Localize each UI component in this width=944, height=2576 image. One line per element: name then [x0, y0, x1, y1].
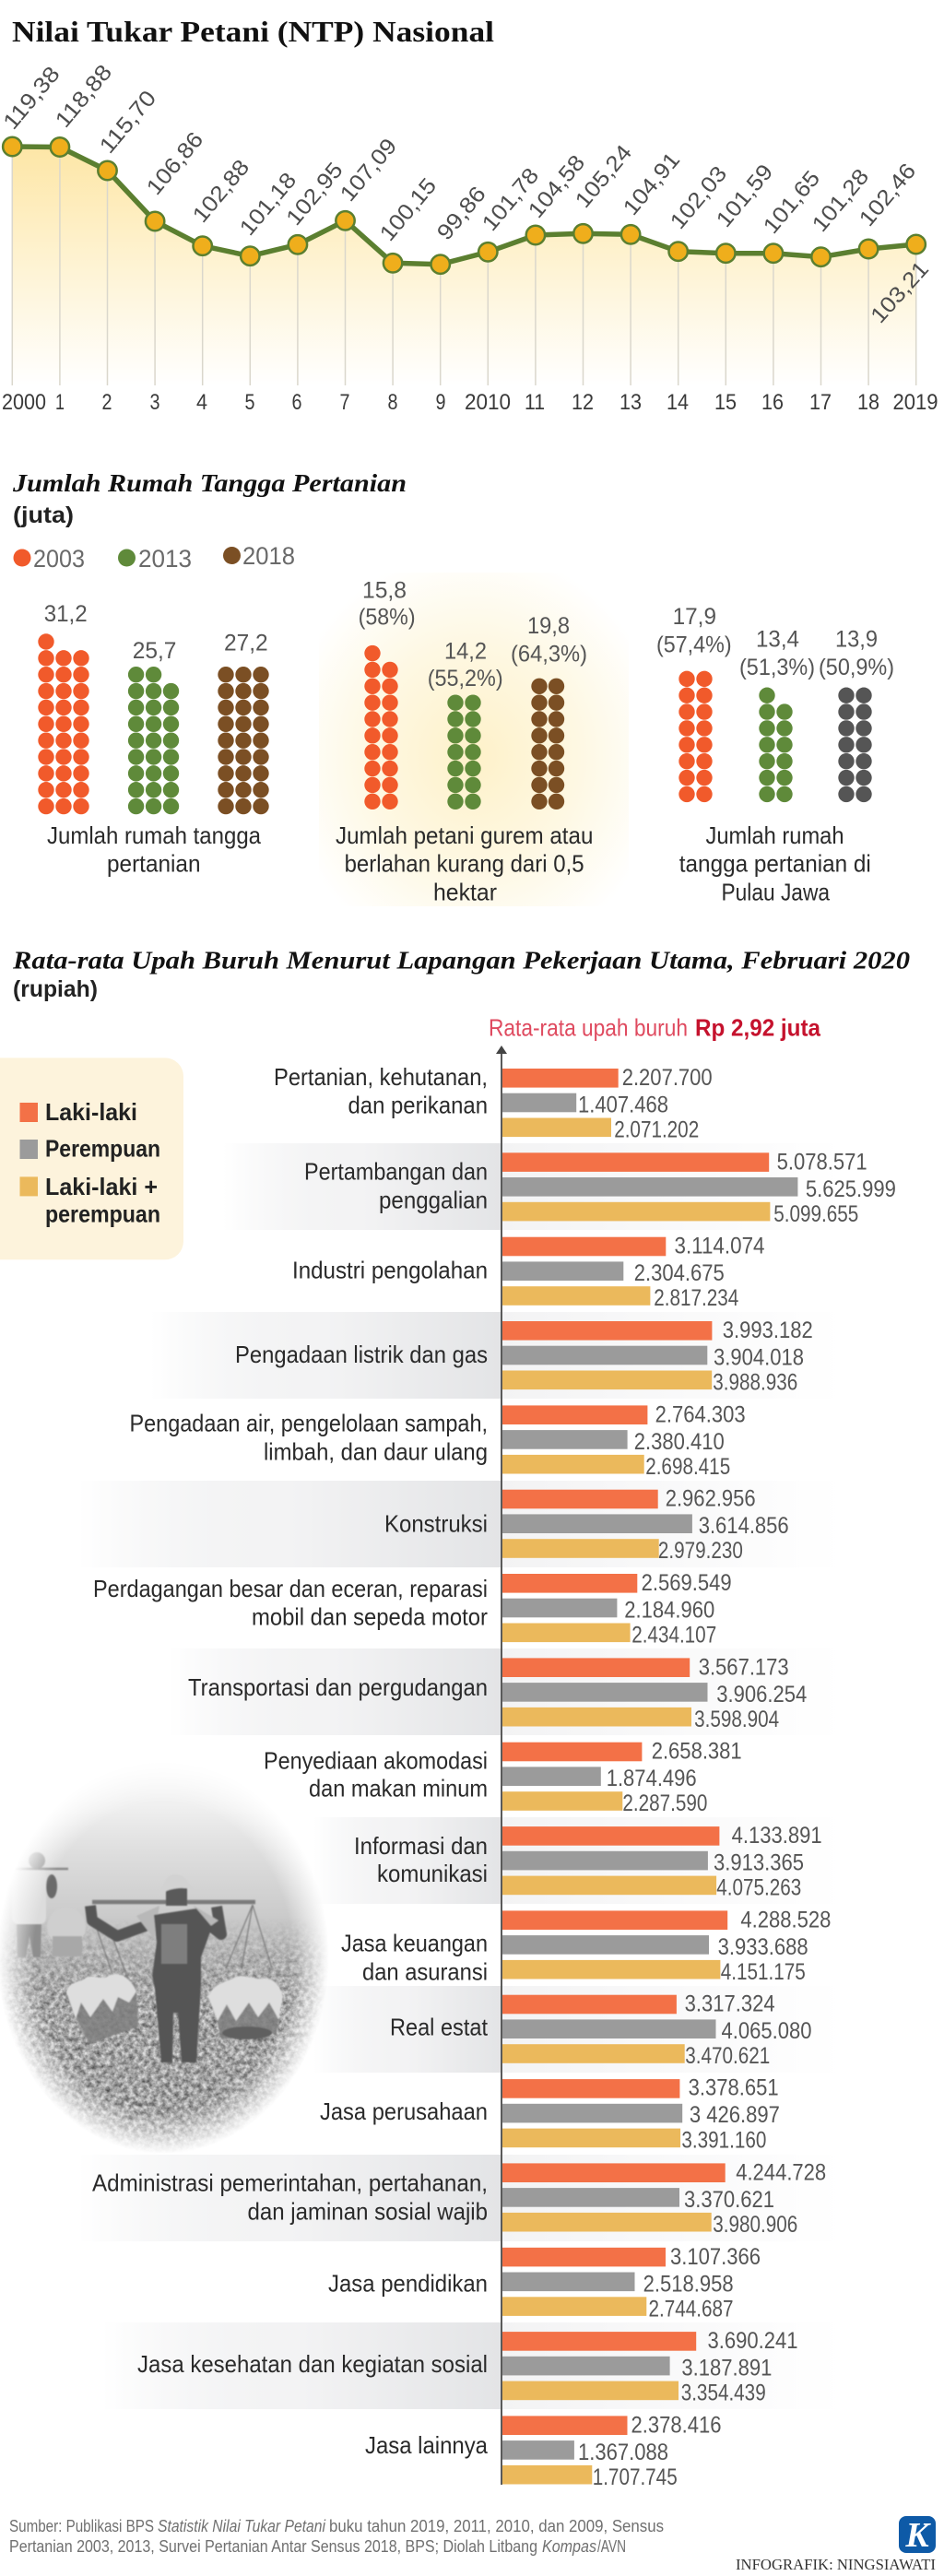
- values: 5.625.999: [806, 1176, 896, 1202]
- values: 2.962.956: [666, 1486, 756, 1512]
- bars: [502, 1321, 712, 1389]
- values: 3.187.891: [681, 2356, 772, 2381]
- values: [684, 2159, 826, 2238]
- row: Transportasi dan pergudangan: [188, 1654, 807, 1732]
- values: 3.378.651: [689, 2075, 779, 2101]
- caption: tangga pertanian di: [679, 849, 871, 877]
- bars: [502, 1069, 619, 1137]
- swatch: perempuan: [20, 1140, 38, 1159]
- category label: mobil dan sepeda motor: [252, 1603, 488, 1631]
- values: 14,2: [444, 639, 487, 665]
- year axis labels: 8: [387, 390, 398, 415]
- legend: years: [13, 542, 295, 573]
- caption: Jumlah petani gurem atau: [336, 821, 593, 849]
- value labels: 106,86: [142, 127, 208, 200]
- dots 2018: [846, 695, 864, 794]
- values: 3.980.906: [713, 2212, 797, 2238]
- values: [624, 1570, 732, 1648]
- row: Real estat: [390, 1991, 811, 2069]
- average wage callout: Rata-rata upah buruh: [489, 1013, 688, 1041]
- values: 1.407.468: [578, 1092, 668, 1117]
- values: [681, 2328, 798, 2406]
- year axis labels: 16: [761, 390, 784, 415]
- caption: [336, 821, 593, 905]
- category label: komunikasi: [377, 1860, 488, 1887]
- values: [694, 1654, 807, 1732]
- value labels: 100,15: [375, 173, 442, 246]
- values: 3.354.439: [681, 2381, 766, 2406]
- values: 4.244.728: [736, 2159, 826, 2185]
- year axis labels: 13: [620, 390, 642, 415]
- values: 17,9: [673, 604, 716, 630]
- value labels: 102,88: [188, 155, 254, 228]
- year axis labels: 11: [525, 390, 545, 415]
- value labels: 103,21: [866, 256, 934, 328]
- legend: years: 2003: [33, 545, 85, 573]
- values: 2.434.107: [631, 1623, 716, 1648]
- year axis labels: 2: [101, 390, 112, 415]
- row: Penyediaan akomodasi: [264, 1739, 742, 1816]
- bars: [502, 1743, 642, 1811]
- values: 2.698.415: [645, 1454, 730, 1480]
- values: [658, 1486, 789, 1564]
- value labels: 119,38: [0, 62, 65, 135]
- values: 2.380.410: [634, 1429, 725, 1455]
- category label: [93, 1575, 488, 1631]
- values: [634, 1401, 746, 1480]
- logo: Kompas K: K: [904, 2516, 931, 2555]
- category label: Konstruksi: [384, 1509, 488, 1537]
- bars: [502, 1826, 719, 1895]
- average wage callout: [489, 1013, 820, 1041]
- row: Jasa kesehatan dan kegiatan sosial: [137, 2328, 798, 2406]
- category label: Jasa kesehatan dan kegiatan sosial: [137, 2350, 488, 2378]
- value labels: 115,70: [95, 86, 161, 159]
- value labels: 105,24: [571, 140, 637, 213]
- values: (57,4%): [656, 632, 732, 658]
- year axis labels: 18: [857, 390, 879, 415]
- values: (51,3%): [739, 655, 815, 680]
- row: Pengadaan air: [129, 1401, 746, 1480]
- category label: [354, 1832, 488, 1887]
- swatch: laki-laki: [20, 1103, 38, 1122]
- category label: Pengadaan listrik dan gas: [235, 1341, 488, 1368]
- category label: Jasa keuangan: [341, 1929, 488, 1956]
- category label: limbah, dan daur ulang: [264, 1437, 488, 1465]
- values: 2.744.687: [649, 2296, 734, 2322]
- axis arrow: [496, 1046, 507, 2485]
- value labels: 101,18: [235, 168, 301, 241]
- year axis labels: 12: [572, 390, 594, 415]
- unit: rupiah: (rupiah): [13, 976, 98, 1002]
- year axis labels: 7: [339, 390, 350, 415]
- values: 4.133.891: [732, 1823, 822, 1849]
- row: Industri pengolahan: [292, 1234, 765, 1311]
- swatch: laki-laki + perempuan: [20, 1176, 38, 1196]
- year axis labels: 2000: [2, 390, 46, 415]
- values: 2.287.590: [622, 1790, 707, 1816]
- values: 3.370.621: [684, 2187, 774, 2213]
- trend line: [12, 147, 916, 265]
- values: (58%): [359, 605, 416, 631]
- category label: [264, 1746, 488, 1802]
- values: 2.184.960: [624, 1597, 714, 1623]
- data points: [3, 137, 926, 274]
- caption: pertanian: [107, 849, 201, 877]
- category label: [341, 1929, 488, 1985]
- source note: Sumber: Publikasi BPS: [9, 2517, 154, 2535]
- category label: Penyediaan akomodasi: [264, 1746, 488, 1774]
- row: Jasa keuangan dan asuransi: [341, 1907, 831, 1985]
- values: 15,8: [362, 578, 407, 604]
- values: 2.764.303: [655, 1401, 746, 1427]
- value labels: 101,65: [759, 166, 825, 239]
- bars: [502, 1152, 797, 1221]
- heading: Jumlah Rumah Tangga Pertanian: Jumlah Rumah Tangga Pertanian: [12, 469, 407, 497]
- bars: [502, 2248, 666, 2316]
- values: [714, 1823, 822, 1901]
- bars: [502, 2332, 696, 2400]
- heading: Rata-rata Upah Buruh: Rata-rata Upah Buruh Menurut Lapangan Pekerjaan Utama, Februari 2020: [12, 947, 911, 975]
- bars: [502, 2416, 627, 2484]
- category label: Jasa perusahaan: [320, 2097, 488, 2125]
- caption: Jumlah rumah: [706, 821, 844, 849]
- values: 2.304.675: [634, 1260, 725, 1286]
- value labels: 99,86: [432, 182, 491, 245]
- value labels: 101,59: [712, 160, 778, 232]
- dots 2013: [767, 695, 785, 794]
- value labels: 104,58: [524, 150, 590, 223]
- values: [578, 1065, 713, 1143]
- values: [359, 578, 587, 691]
- source note: /AVN: [597, 2537, 626, 2556]
- category label: Pertanian, kehutanan,: [274, 1063, 488, 1091]
- panel: jumlah rumah tangga pertanian: [44, 601, 268, 877]
- logo: Kompas K: [899, 2516, 936, 2555]
- photo: farmer carrying baskets on shoulder pole: [0, 1790, 326, 2151]
- values: 31,2: [44, 601, 88, 627]
- values: 2.979.230: [658, 1538, 743, 1564]
- values: [634, 1234, 765, 1311]
- year axis labels: 4: [196, 390, 207, 415]
- values: 19,8: [527, 613, 570, 639]
- bars: [502, 1910, 727, 1979]
- values: 3.107.366: [670, 2244, 761, 2270]
- values: [681, 2075, 780, 2154]
- row: Administrasi pemerintahan: [92, 2159, 826, 2238]
- values: 2.569.549: [642, 1570, 732, 1596]
- category label: Informasi dan: [354, 1832, 488, 1860]
- year axis labels: 9: [435, 390, 446, 415]
- bars: [502, 1237, 666, 1306]
- line chart: NTP: [0, 60, 938, 415]
- values: [643, 2244, 761, 2322]
- source note: Statistik Nilai Tukar Petani: [158, 2517, 326, 2535]
- dots 2003: [46, 642, 81, 807]
- bars: [502, 1574, 637, 1642]
- caption: Pulau Jawa: [721, 878, 830, 905]
- values: 27,2: [224, 631, 268, 656]
- values: 2.817.234: [654, 1285, 738, 1311]
- value labels: 118,88: [51, 60, 117, 133]
- values: 3.988.936: [713, 1370, 797, 1396]
- category label: Jasa lainnya: [365, 2431, 488, 2459]
- average wage callout: Rp 2,92 juta: [695, 1013, 820, 1041]
- source note: Pertanian 2003, 2013, Survei Pertanian Antar Sensus 2018, BPS; Diolah Litbang: [9, 2537, 537, 2556]
- row: Konstruksi: [384, 1486, 789, 1564]
- dots 2003: [372, 653, 390, 801]
- area under line: [12, 147, 916, 385]
- unit: juta: (juta): [13, 502, 74, 528]
- values: 13,9: [835, 626, 878, 652]
- year axis labels: 6: [291, 390, 302, 415]
- values: 3.567.173: [699, 1654, 789, 1680]
- value labels: [0, 60, 934, 328]
- legend: years: 2018: [242, 542, 295, 570]
- row: Perdagangan besar: [93, 1570, 732, 1648]
- values: 3.470.621: [685, 2043, 770, 2069]
- category label: Perdagangan besar dan eceran, reparasi: [93, 1575, 488, 1602]
- caption: [47, 821, 261, 877]
- caption: [679, 821, 871, 905]
- values: 13,4: [756, 626, 799, 652]
- values: 4.075.263: [716, 1875, 801, 1901]
- values: 1.707.745: [593, 2464, 678, 2490]
- bars: [502, 2079, 682, 2147]
- category label: Pertambangan dan: [304, 1157, 488, 1185]
- category label: dan perikanan: [348, 1092, 488, 1119]
- category label: [129, 1409, 488, 1465]
- values: 3.933.688: [718, 1934, 808, 1960]
- values: (55,2%): [428, 666, 503, 691]
- value labels: 107,09: [336, 134, 402, 207]
- row: Jasa pendidikan: [328, 2244, 761, 2322]
- values: 3.690.241: [708, 2328, 798, 2354]
- source note: [9, 2517, 664, 2556]
- value labels: 101,28: [808, 164, 874, 237]
- year axis labels: 5: [245, 390, 254, 415]
- year axis labels: 2010: [465, 390, 511, 415]
- category label: Pengadaan air, pengelolaan sampah,: [129, 1409, 488, 1436]
- category label: Jasa pendidikan: [328, 2269, 488, 2297]
- category label: [274, 1063, 488, 1119]
- category label: dan makan minum: [309, 1775, 488, 1802]
- category label: Industri pengolahan: [292, 1257, 488, 1284]
- row: Informasi dan komunikasi: [354, 1823, 822, 1901]
- source note: buku tahun 2019, 2011, 2010, dan 2009, Sensus: [329, 2517, 664, 2535]
- legend: wage series: [0, 1058, 183, 1259]
- values: 2.378.416: [631, 2412, 721, 2438]
- values: 4.065.080: [721, 2018, 811, 2044]
- values: 3.906.254: [716, 1682, 807, 1707]
- label: laki-laki + perempuan: Laki-laki +: [45, 1173, 158, 1200]
- values: [44, 601, 268, 664]
- dots 2018: [539, 686, 557, 801]
- values: 5.078.571: [777, 1149, 867, 1175]
- bars: [502, 1658, 708, 1726]
- legend panel: [0, 1058, 183, 1259]
- category label: Transportasi dan pergudangan: [188, 1673, 488, 1701]
- values: (64,3%): [511, 642, 587, 668]
- year axis labels: 17: [809, 390, 832, 415]
- bars: [502, 1490, 692, 1558]
- dots 2018: [226, 674, 261, 807]
- year axis labels: 2019: [892, 390, 938, 415]
- panel: jumlah petani gurem: [336, 578, 593, 905]
- dots 2013: [455, 703, 473, 801]
- values: 3 426.897: [690, 2102, 780, 2128]
- row: Jasa perusahaan: [320, 2075, 780, 2154]
- value labels: 102,95: [281, 158, 348, 230]
- row: Pertambangan dan penggalian: [304, 1149, 896, 1227]
- year axis labels: 15: [714, 390, 737, 415]
- panel: rumah tangga pertanian di Pulau Jawa: [656, 604, 894, 905]
- value labels: 104,91: [619, 148, 685, 220]
- values: 1.367.088: [578, 2440, 668, 2465]
- source note: Kompas: [542, 2537, 596, 2556]
- category label: [92, 2168, 488, 2225]
- values: 3.317.324: [685, 1991, 775, 2017]
- values: 3.904.018: [714, 1344, 804, 1370]
- value labels: 102,03: [666, 161, 732, 234]
- values: [607, 1739, 742, 1816]
- values: [685, 1991, 811, 2069]
- legend: years: 2013: [138, 545, 192, 573]
- year axis labels: 3: [149, 390, 160, 415]
- value labels: 102,46: [855, 159, 921, 231]
- category label: penggalian: [379, 1186, 488, 1213]
- values: [656, 604, 894, 680]
- value labels: 101,78: [478, 163, 544, 236]
- values: 3.598.904: [694, 1707, 779, 1732]
- caption: berlahan kurang dari 0,5: [345, 849, 584, 877]
- values: [713, 1318, 813, 1396]
- caption: hektar: [433, 878, 497, 905]
- category label: Administrasi pemerintahan, pertahanan,: [92, 2168, 488, 2196]
- category label: Real estat: [390, 2013, 489, 2040]
- values: [773, 1149, 896, 1227]
- values: 3.993.182: [723, 1318, 813, 1343]
- year axis labels: [2, 390, 938, 415]
- values: 4.151.175: [721, 1959, 806, 1985]
- values: 3.913.365: [714, 1850, 804, 1876]
- credit: INFOGRAFIK: NINGSIAWATI: [736, 2556, 936, 2573]
- dots 2003: [687, 679, 704, 794]
- values: 25,7: [133, 638, 176, 664]
- label: laki-laki + perempuan: [45, 1173, 160, 1228]
- label: laki-laki + perempuan: perempuan: [45, 1200, 160, 1228]
- values: 2.518.958: [643, 2271, 734, 2297]
- row: Pengadaan listrik dan gas: [235, 1318, 813, 1396]
- values: 2.071.202: [614, 1117, 699, 1143]
- label: perempuan: Perempuan: [45, 1134, 160, 1162]
- category label: dan jaminan sosial wajib: [247, 2197, 488, 2225]
- panel: petani gurem highlight background: [319, 573, 629, 906]
- values: 3.614.856: [699, 1513, 789, 1539]
- values: 1.874.496: [607, 1766, 697, 1791]
- row: Jasa lainnya: [365, 2412, 721, 2490]
- values: 3.391.160: [681, 2128, 766, 2154]
- year axis labels: 14: [667, 390, 689, 415]
- values: (50,9%): [819, 655, 894, 680]
- values: [718, 1907, 831, 1985]
- label: laki-laki: Laki-laki: [45, 1098, 137, 1126]
- values: 2.658.381: [652, 1739, 742, 1765]
- caption: Jumlah rumah tangga: [47, 821, 261, 849]
- category label: dan asuransi: [362, 1957, 488, 1985]
- values: 4.288.528: [740, 1907, 831, 1932]
- bars: [502, 2163, 726, 2231]
- values: 5.099.655: [773, 1201, 858, 1227]
- values: 3.114.074: [675, 1234, 765, 1259]
- bars: [502, 1995, 715, 2063]
- dots 2013: [136, 674, 171, 807]
- values: 2.207.700: [622, 1065, 713, 1091]
- year axis labels: 1: [55, 390, 65, 415]
- bars: [502, 1405, 647, 1473]
- category label: [304, 1157, 488, 1213]
- values: [578, 2412, 721, 2490]
- title: Nilai Tukar Petani (NTP) Nasional: [12, 15, 494, 48]
- row: Pertanian, kehutanan, dan perikanan: [274, 1063, 713, 1143]
